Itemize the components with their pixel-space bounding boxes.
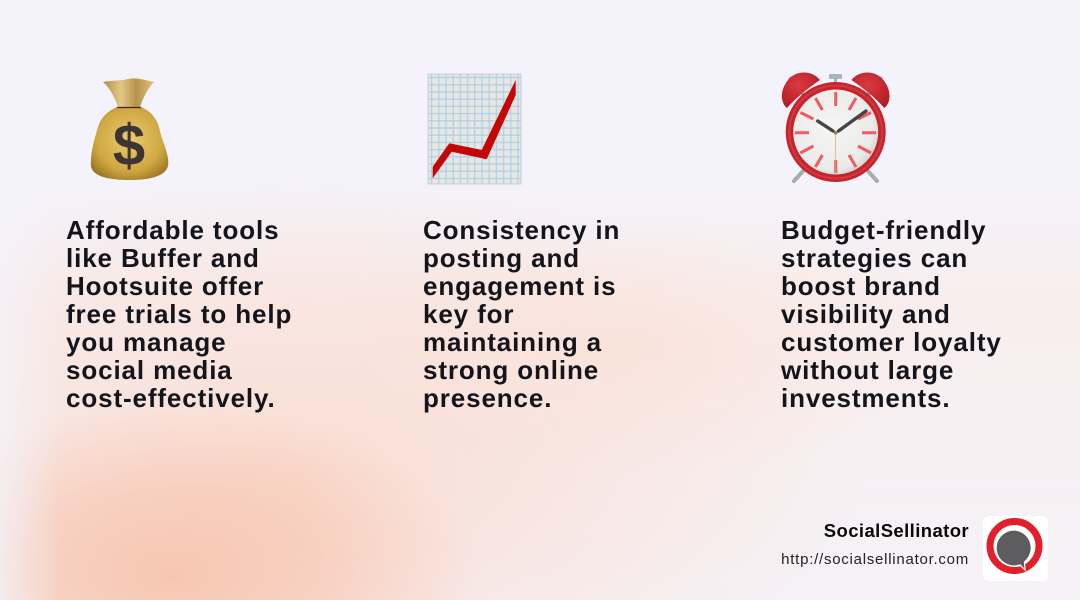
text block: consistency: maintaining a (423, 327, 602, 357)
clock body (786, 82, 886, 182)
icon: alarm clock (782, 72, 890, 184)
icon: chart increasing (428, 74, 522, 184)
text block: budget-friendly: investments. (781, 383, 951, 413)
logo (983, 516, 1048, 581)
text block: consistency: key for (423, 299, 514, 329)
text block: affordable tools: free trials to help (66, 299, 292, 329)
text block: budget-friendly (780, 215, 1002, 413)
text block: affordable tools: social media (66, 355, 233, 385)
text block: consistency: presence. (423, 383, 552, 413)
text block: affordable tools: cost-effectively. (66, 383, 276, 413)
text block: budget-friendly: boost brand (781, 271, 941, 301)
text block: consistency: Consistency in (423, 215, 620, 245)
icon: money bag: $ (113, 113, 145, 178)
brand name: SocialSellinator (824, 520, 969, 541)
text block: affordable tools: like Buffer and (66, 243, 260, 273)
brand url: http://socialsellinator.com (781, 551, 969, 568)
text block: affordable tools: you manage (66, 327, 227, 357)
text block: budget-friendly: strategies can (781, 243, 968, 273)
clock feet (794, 170, 877, 181)
text block: consistency: posting and (423, 243, 580, 273)
text block: consistency (423, 215, 620, 413)
text block: affordable tools (66, 215, 292, 413)
text block: budget-friendly: without large (781, 355, 954, 385)
text block: affordable tools: Affordable tools (66, 215, 279, 245)
text block: budget-friendly: customer loyalty (781, 327, 1002, 357)
text block: budget-friendly: visibility and (781, 299, 951, 329)
icon: money bag (90, 78, 168, 180)
text block: affordable tools: Hootsuite offer (66, 271, 264, 301)
text block: consistency: strong online (423, 355, 599, 385)
text block: consistency: engagement is (423, 271, 616, 301)
clock bells (782, 72, 890, 108)
text block: budget-friendly: Budget-friendly (781, 215, 986, 245)
